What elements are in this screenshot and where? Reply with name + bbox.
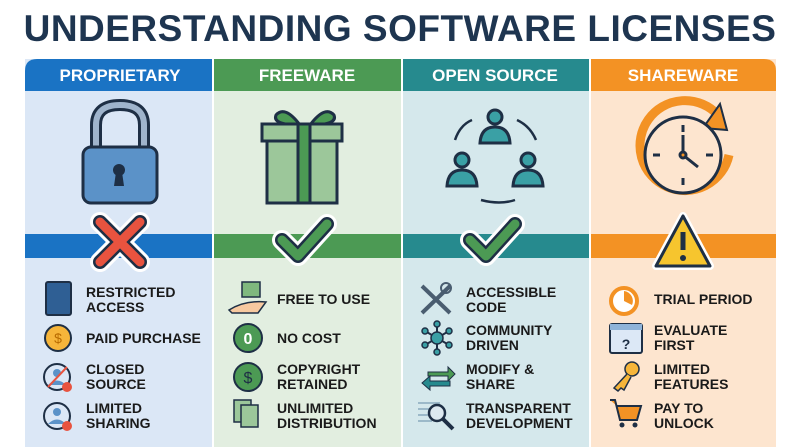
item: pay to unlock: UNLOCK [654, 415, 714, 431]
item: unlimited distribution: DISTRIBUTION [277, 415, 377, 431]
header: open source: OPEN SOURCE [432, 66, 558, 85]
item: modify and share: SHARE [466, 376, 515, 392]
item: limited sharing [44, 400, 151, 431]
icon: gift [262, 112, 342, 203]
item: community driven: COMMUNITY [466, 322, 553, 338]
panel: proprietary [25, 59, 212, 447]
header: shareware [591, 59, 776, 91]
item: free to use: FREE TO USE [277, 291, 370, 307]
item: limited features: FEATURES [654, 376, 728, 392]
item: closed source: CLOSED [86, 361, 144, 377]
item: evaluate first [610, 322, 727, 353]
item: transparent development: TRANSPARENT [466, 400, 571, 416]
header: open source [403, 59, 589, 91]
icon: warning triangle [656, 216, 710, 266]
item: accessible code: CODE [466, 299, 506, 315]
item: free to use [229, 282, 370, 313]
item: restricted access: RESTRICTED [86, 284, 175, 300]
item: limited sharing: LIMITED [86, 400, 142, 416]
item: unlimited distribution: UNLIMITED [277, 400, 353, 416]
item: modify and share: MODIFY & [466, 361, 534, 377]
item: modify and share [422, 361, 534, 392]
item: no cost [234, 324, 341, 352]
item: restricted access [46, 282, 175, 315]
item: paid purchase: $ [54, 330, 62, 346]
panel: open source [403, 59, 589, 447]
icon: green check [470, 224, 515, 256]
header: proprietary: PROPRIETARY [60, 66, 181, 85]
item: limited sharing: SHARING [86, 415, 151, 431]
item: no cost: 0 [244, 331, 253, 348]
item: evaluate first: ? [622, 336, 630, 352]
item: pay to unlock: PAY TO [654, 400, 703, 416]
item: accessible code [422, 283, 556, 315]
icon: red cross [100, 222, 140, 262]
panel: freeware [214, 59, 401, 447]
item: unlimited distribution [234, 400, 377, 431]
item: copyright retained [234, 361, 361, 392]
icon: green check [282, 224, 327, 256]
item: pay to unlock [610, 400, 714, 431]
header: proprietary [25, 59, 212, 91]
icon: community circle [447, 110, 543, 202]
panel: shareware [591, 59, 776, 447]
item: evaluate first: EVALUATE [654, 322, 727, 338]
item: limited features: LIMITED [654, 361, 710, 377]
item: paid purchase [45, 325, 201, 351]
item: community driven [422, 321, 553, 355]
item: no cost: NO COST [277, 330, 341, 346]
item: closed source [44, 361, 146, 392]
item: evaluate first: FIRST [654, 337, 695, 353]
item: restricted access: ACCESS [86, 299, 144, 315]
item: paid purchase: PAID PURCHASE [86, 330, 201, 346]
item: accessible code: ACCESSIBLE [466, 284, 556, 300]
title: UNDERSTANDING SOFTWARE LICENSES [24, 8, 776, 49]
item: copyright retained: RETAINED [277, 376, 348, 392]
header: shareware: SHAREWARE [628, 66, 738, 85]
item: limited features [614, 361, 728, 392]
icon: padlock [83, 105, 157, 203]
item: transparent development: DEVELOPMENT [466, 415, 573, 431]
item: trial period [611, 288, 753, 314]
header: freeware: FREEWARE [259, 66, 355, 85]
item: trial period: TRIAL PERIOD [654, 291, 753, 307]
item: transparent development [418, 400, 573, 431]
item: community driven: DRIVEN [466, 337, 519, 353]
item: copyright retained: $ [244, 370, 253, 387]
item: closed source: SOURCE [86, 376, 146, 392]
header: freeware [214, 59, 401, 91]
item: copyright retained: COPYRIGHT [277, 361, 361, 377]
icon: clock with arrow [640, 101, 729, 193]
